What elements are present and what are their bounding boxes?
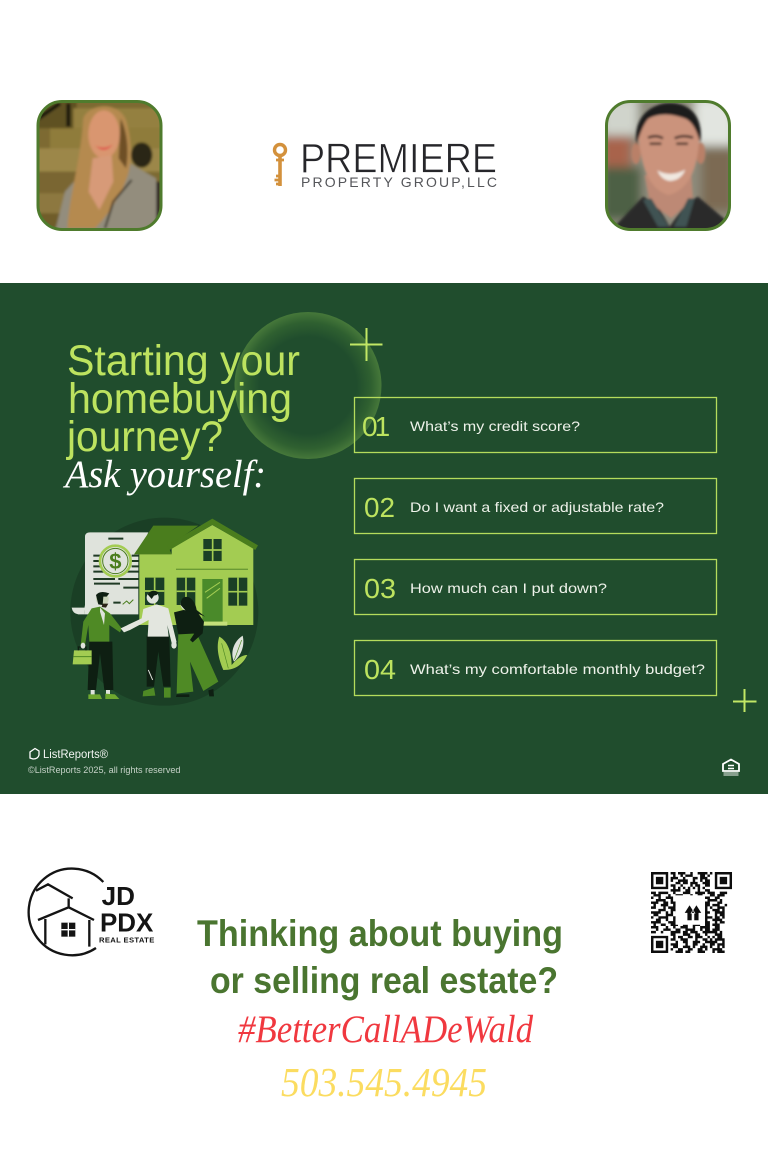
question 4 [354, 640, 716, 696]
logo: Premiere Property Group: PROPERTY GROUP,LLC [301, 174, 497, 190]
call to action: Thinking about buying [197, 913, 563, 954]
heading [65, 337, 300, 461]
logo: Premiere Property Group: PREMIERE [300, 134, 497, 182]
main house [168, 522, 257, 626]
logo: Premiere Property Group [274, 134, 497, 190]
person: woman in green trousers [174, 597, 218, 697]
heading: Starting your [67, 337, 300, 385]
icon: QR centre arrows [684, 905, 702, 921]
heading: journey? [65, 413, 223, 461]
call to action: or selling real estate? [210, 960, 558, 1001]
subheading: Ask yourself: [62, 453, 266, 496]
decorative ring [234, 312, 382, 459]
logo: JD PDX Real Estate: PDX [100, 908, 154, 938]
logo: JD PDX Real Estate [29, 869, 154, 955]
question 2 [354, 478, 716, 534]
illustration: buyers shaking hands outside a house [70, 518, 258, 706]
question 4: 04 [364, 654, 396, 685]
logo: JD PDX Real Estate: REAL ESTATE [99, 935, 154, 944]
question 1: What’s my credit score? [410, 418, 580, 434]
hashtag: #BetterCallADeWald [238, 1008, 533, 1051]
question 3: 03 [364, 573, 396, 604]
icon: plus sparkle bottom [733, 689, 756, 712]
icon: gold key [274, 144, 286, 186]
document: $ [109, 549, 121, 574]
document [72, 532, 148, 614]
photo: woman agent [36, 100, 162, 231]
panel: homebuying questions [0, 283, 768, 794]
icon: equal housing [723, 760, 739, 775]
call to action [197, 913, 563, 1105]
person: buyer in white shirt [121, 591, 177, 698]
question 2: Do I want a fixed or adjustable rate? [410, 499, 664, 515]
phone number: 503.545.4945 [281, 1059, 487, 1105]
photo: man agent [605, 100, 731, 231]
question 3 [354, 560, 716, 614]
question 3: How much can I put down? [410, 580, 607, 596]
left house [134, 526, 198, 625]
question 1: 01 [362, 411, 390, 442]
question 4: What’s my comfortable monthly budget? [410, 661, 705, 677]
question 1 [354, 398, 716, 452]
logo: JD PDX Real Estate: JD [102, 881, 135, 911]
footer brand: ListReports: ListReports® [43, 749, 109, 761]
icon: plus sparkle top [350, 328, 382, 361]
QR code [651, 873, 731, 952]
plant [218, 636, 247, 670]
question 2: 02 [364, 492, 395, 523]
copyright: ©ListReports 2025, all rights reserved [28, 765, 180, 775]
heading: homebuying [68, 375, 292, 423]
person: man with briefcase [73, 592, 122, 699]
